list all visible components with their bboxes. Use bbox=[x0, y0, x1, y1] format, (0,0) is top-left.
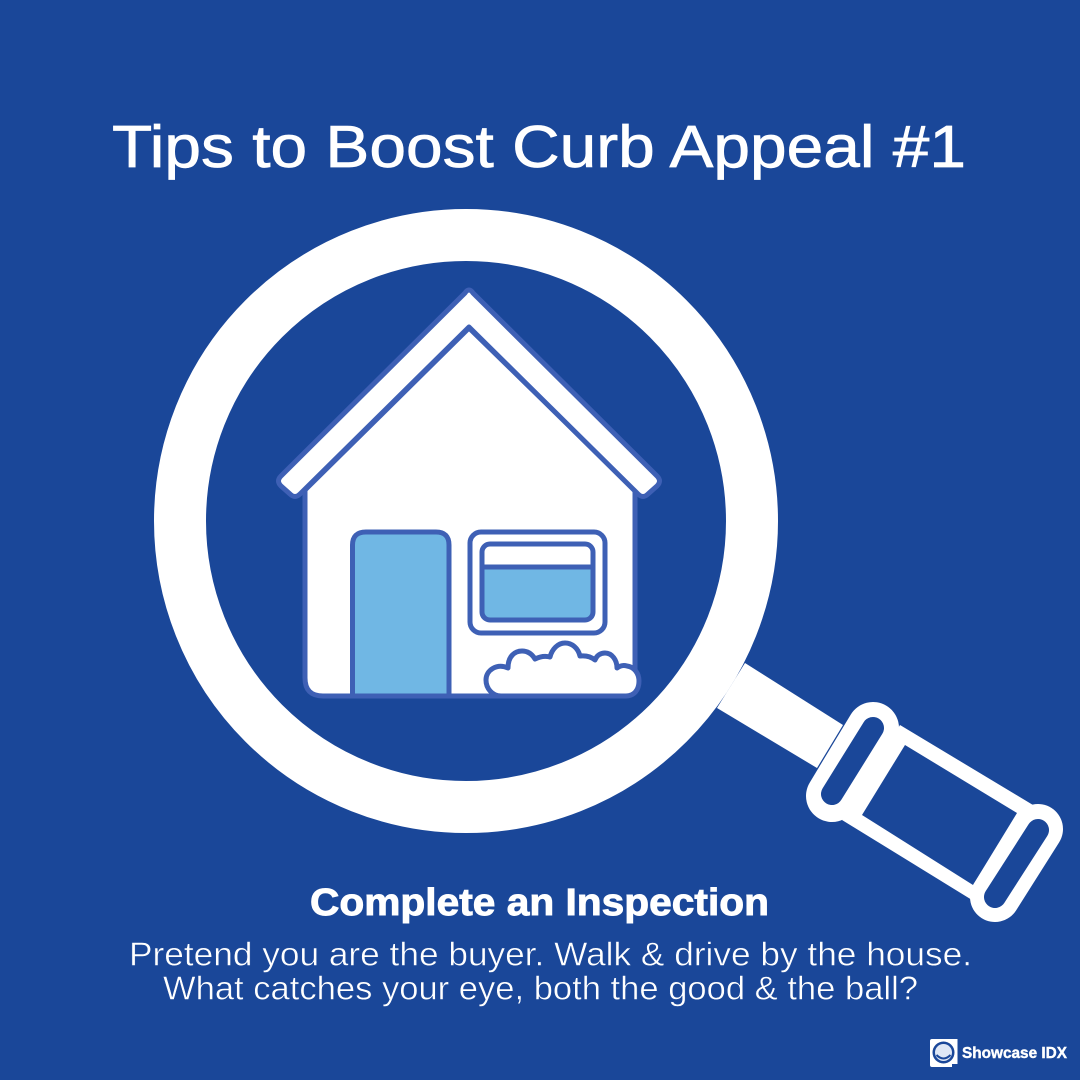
house wall bbox=[305, 328, 635, 696]
title: Tips to Boost Curb Appeal #1 bbox=[112, 114, 966, 180]
body text bbox=[129, 936, 972, 1006]
door bbox=[352, 532, 449, 696]
handle shaft bbox=[717, 663, 843, 768]
handle grip bbox=[832, 725, 1038, 900]
logo wordmark: Showcase IDX bbox=[962, 1045, 1068, 1062]
body text: What catches your eye, both the good & the ball? bbox=[163, 970, 918, 1006]
logo: Showcase IDX bbox=[930, 1039, 1068, 1067]
window pane bbox=[482, 544, 593, 620]
roof bbox=[278, 290, 660, 496]
lens ring bbox=[180, 235, 752, 807]
body text: Pretend you are the buyer. Walk & drive by the house. bbox=[129, 936, 972, 972]
logo icon bbox=[930, 1039, 958, 1067]
window frame bbox=[470, 532, 605, 633]
bush bbox=[486, 643, 639, 696]
subheading: Complete an Inspection bbox=[310, 882, 769, 924]
icon: magnifying glass bbox=[180, 235, 1038, 900]
icon: house bbox=[278, 290, 660, 696]
